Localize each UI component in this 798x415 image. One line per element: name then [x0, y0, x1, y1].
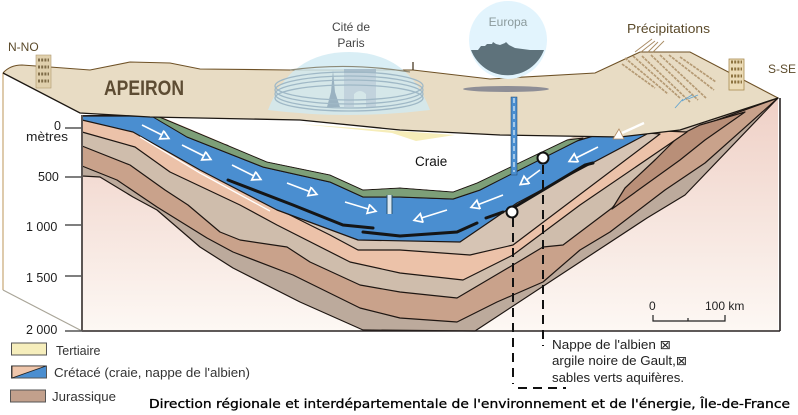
layer: blue Albian aquifer: [82, 116, 647, 242]
precipitation hatching: [622, 55, 716, 102]
layer: grey-beige band: [82, 98, 778, 298]
heading: APEIRON: APEIRON: [104, 77, 184, 100]
axis labels: 1 000: [26, 220, 57, 234]
label: Cité de Paris: Cité de: [332, 20, 370, 34]
axis labels: 500: [38, 170, 59, 184]
infiltration blue strokes: [675, 95, 698, 108]
axis labels: mètres: [26, 130, 68, 144]
legend item: Tertiaire: [12, 343, 101, 358]
well: Paris pipe: [387, 195, 392, 214]
label: Craie: Craie: [415, 154, 447, 169]
label: S-SE: S-SE: [768, 62, 796, 76]
surface plateau APEIRON: [3, 52, 778, 137]
source caption: Direction régionale et interdépartementale de l'environnement et de l'énergie, Île-de-France: [149, 396, 790, 411]
legend item: Crétacé: Crétacé (craie, nappe de l'albien): [54, 366, 250, 380]
legend: [10, 343, 250, 404]
well: Europa pipe: [511, 97, 517, 175]
rings: [275, 72, 423, 111]
marker circles: [506, 152, 548, 218]
recharge arrow: [613, 123, 644, 139]
surface outline: [3, 52, 778, 137]
axis labels: 0: [54, 119, 61, 133]
tertiary pale yellow band: [300, 124, 455, 141]
layer: grey thin band: [170, 120, 660, 255]
flow arrows: [142, 125, 598, 220]
layer: wedge brown: [612, 112, 745, 209]
thin white seam: [140, 137, 270, 211]
icon: Arc de Triomphe: [344, 69, 376, 107]
layer: Jurassic brown band: [82, 98, 778, 322]
label: Cité de Paris: [332, 20, 370, 50]
note: Nappe de l'albien: argile noire de Gault,⊠: [552, 354, 687, 368]
icon: Eiffel Tower: [327, 70, 340, 107]
legend item: Jurassique: Jurassique: [52, 390, 116, 404]
layer: peach chalk band: [82, 116, 687, 280]
black Gault clay: [228, 163, 593, 236]
scale bar: 0: [649, 299, 656, 313]
layer: green sands: [153, 116, 583, 199]
icon: right building: [729, 59, 744, 90]
label: Europa: Europa: [489, 15, 528, 29]
dashed leaders: [513, 165, 566, 388]
axis ticks: [65, 128, 82, 331]
label: Cité de Paris: Paris: [337, 36, 365, 50]
sphere: Europa: [469, 1, 547, 79]
note: Nappe de l'albien: Nappe de l'albien ⊠: [552, 338, 671, 352]
pink basement: right: [470, 98, 778, 331]
section box outline: [3, 73, 82, 331]
note: Nappe de l'albien: [552, 338, 687, 385]
rain strokes: [635, 39, 664, 52]
axis labels: 2 000: [26, 323, 57, 337]
axis labels: 1 500: [26, 271, 57, 285]
chalk white area: [157, 115, 590, 192]
geological strata: [82, 98, 778, 331]
box right edge and base: [82, 98, 780, 331]
legend item: Jurassique: [10, 390, 116, 404]
dome: Cité de Paris: [268, 52, 430, 115]
note: Nappe de l'albien: sables verts aquifères.: [552, 371, 684, 385]
icon: left building: [36, 55, 51, 88]
label: Précipitations: Précipitations: [627, 21, 711, 36]
sphere shadow: [463, 86, 549, 92]
legend item: Tertiaire: Tertiaire: [56, 344, 101, 358]
pink basement: left: [82, 116, 370, 331]
axis labels: [26, 119, 68, 337]
label: N-NO: N-NO: [8, 40, 39, 54]
scale bar: 100 km: [705, 299, 744, 313]
layer: Jurassic lower band: [82, 98, 778, 331]
scale bar: [649, 299, 744, 321]
